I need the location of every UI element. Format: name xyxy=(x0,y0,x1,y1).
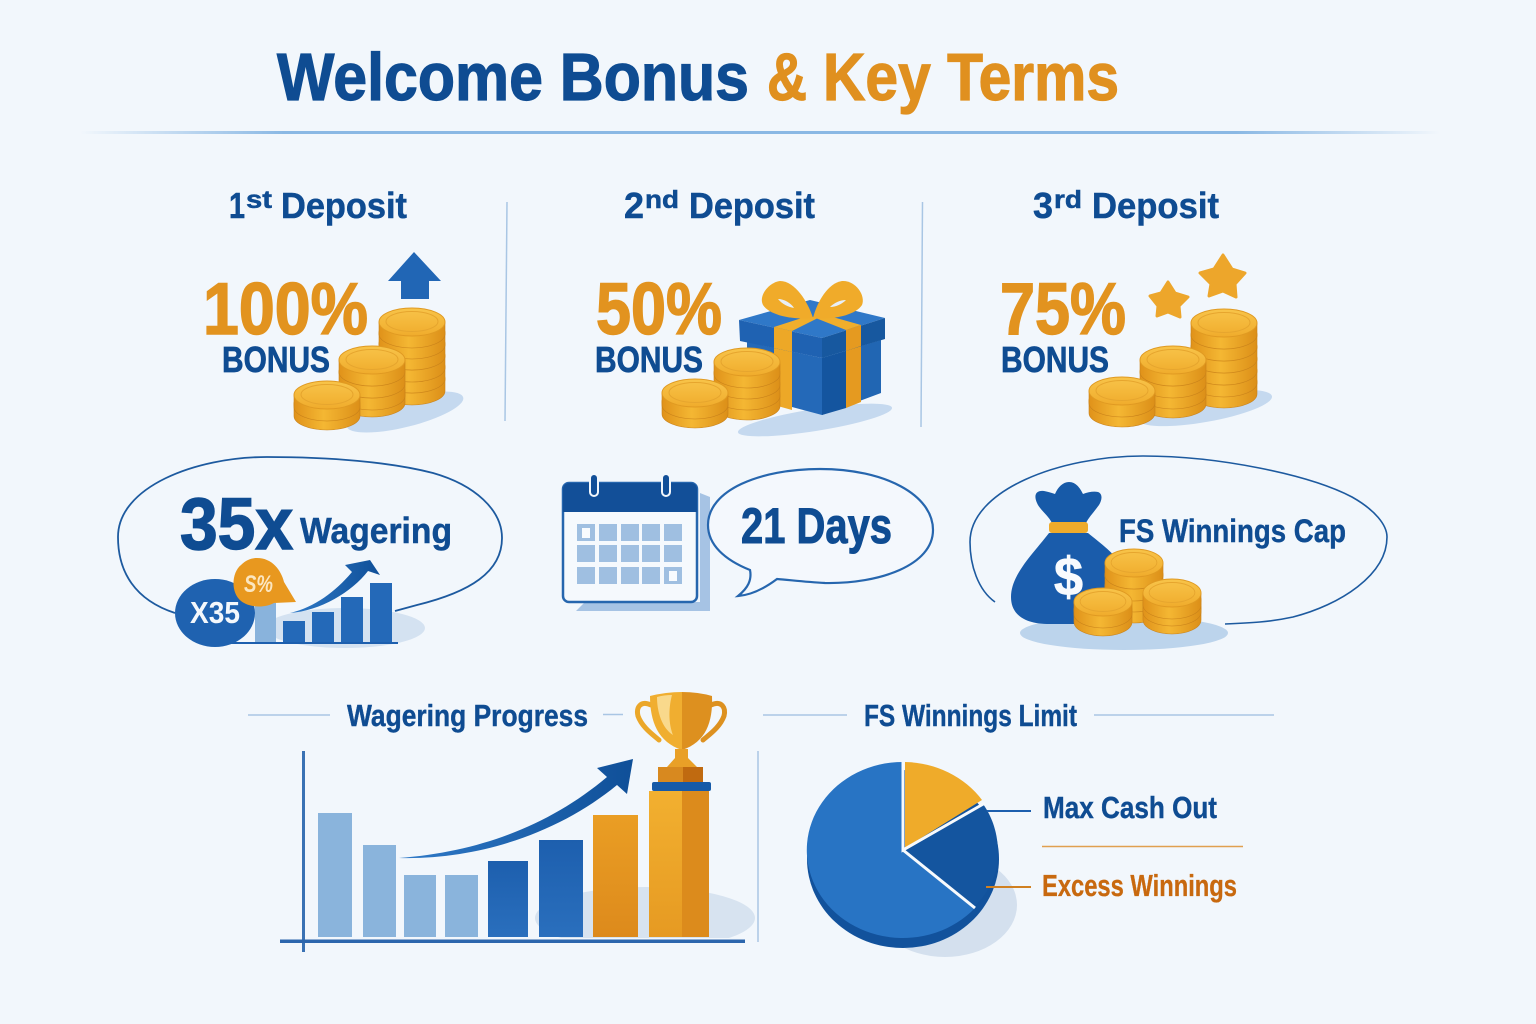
callout: 35x wagering xyxy=(118,457,502,648)
icon: calendar xyxy=(563,474,710,611)
panel: wagering progress xyxy=(248,692,770,968)
100% figure: 100% xyxy=(203,269,368,350)
title: & xyxy=(767,40,807,115)
21 days text: 21 Days xyxy=(741,498,892,554)
arrow: growth curve xyxy=(399,759,633,858)
mini bar chart xyxy=(230,560,425,648)
badge: percent tag xyxy=(233,558,296,607)
icon: money bag xyxy=(1011,482,1228,650)
icon: gift box xyxy=(736,281,894,443)
heading: 2nd deposit: nd xyxy=(645,186,679,214)
heading: 3rd deposit: Deposit xyxy=(1092,185,1219,226)
bonus label: BONUS xyxy=(1001,339,1109,380)
badge: x35: X35 xyxy=(190,595,240,630)
50% figure: 50% xyxy=(596,269,722,350)
fs winnings cap label: FS Winnings Cap xyxy=(1119,513,1346,549)
callout outline xyxy=(970,456,1387,624)
heading: 2nd deposit: 2 xyxy=(624,185,644,226)
heading: 1st deposit: Deposit xyxy=(281,185,407,226)
heading: fs winnings limit: FS Winnings Limit xyxy=(864,698,1077,733)
bar chart xyxy=(280,751,770,968)
label: max cash out: Max Cash Out xyxy=(1043,790,1217,825)
heading: 2nd deposit: Deposit xyxy=(689,185,815,226)
leader line: excess winnings xyxy=(986,886,1031,888)
35x figure: 35x xyxy=(180,484,293,565)
callout: fs winnings cap xyxy=(970,456,1387,650)
icon: coin stacks xyxy=(294,308,467,441)
icon: money bag: $ xyxy=(1054,547,1083,607)
heading: 3rd deposit: 3 xyxy=(1033,185,1053,226)
bonus label: BONUS xyxy=(222,339,330,380)
bonus label: BONUS xyxy=(595,339,703,380)
heading: wagering progress: Wagering Progress xyxy=(347,698,588,733)
callout outline xyxy=(118,457,502,613)
icon: stars xyxy=(1150,255,1245,317)
icon: up arrow xyxy=(388,252,441,299)
panel: fs winnings limit xyxy=(763,698,1274,957)
pie chart xyxy=(807,762,1017,957)
leader line: max cash out xyxy=(987,810,1031,812)
icon: coin stacks xyxy=(1089,309,1274,434)
icon: trophy xyxy=(638,692,724,791)
heading: 1st deposit: st xyxy=(246,186,273,214)
heading: 3rd deposit: rd xyxy=(1054,186,1082,214)
callout: 21 days xyxy=(563,469,933,611)
badge: x35 xyxy=(175,579,255,647)
panel: 3rd deposit xyxy=(1000,185,1274,434)
icon: coin stacks xyxy=(1074,549,1201,636)
icon: coin stacks xyxy=(662,348,780,428)
title: Welcome Bonus xyxy=(277,40,749,115)
heading: 1st deposit: 1 xyxy=(229,185,245,226)
panel: 2nd deposit xyxy=(595,185,894,443)
title: Key Terms xyxy=(823,40,1119,115)
label: excess winnings: Excess Winnings xyxy=(1042,868,1237,903)
75% figure: 75% xyxy=(1000,269,1126,350)
panel: 1st deposit xyxy=(203,185,467,441)
badge: percent tag: S% xyxy=(244,571,273,598)
speech bubble xyxy=(708,469,933,596)
title xyxy=(277,40,1119,115)
wagering label: Wagering xyxy=(300,510,452,551)
